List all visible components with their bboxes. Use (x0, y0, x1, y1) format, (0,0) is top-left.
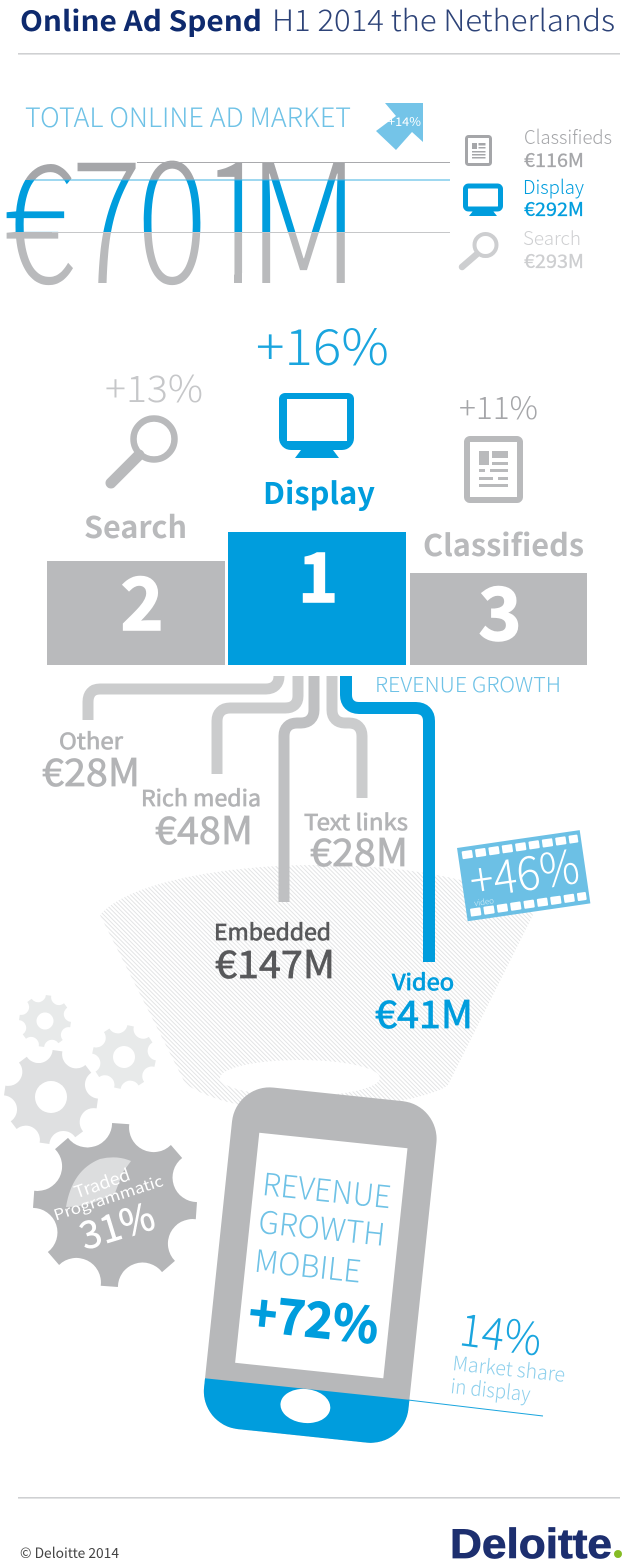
phone heading: MOBILE (253, 1236, 364, 1292)
podium step 2 (47, 546, 225, 665)
gear small right (86, 1019, 162, 1095)
film strip video growth: video (473, 895, 495, 909)
legend: display (466, 173, 585, 222)
category: embedded: €147M (215, 934, 335, 989)
category: other: €28M (42, 742, 140, 797)
category: video: Video (392, 965, 454, 997)
legend: display: €292M (524, 195, 584, 222)
pipe: rich media (217, 676, 298, 774)
pipe: video (346, 676, 429, 962)
phone screen (235, 1133, 407, 1378)
classifieds growth: +11% (459, 383, 538, 428)
category: video: €41M (375, 984, 473, 1039)
mobile growth figure: +72% (246, 1274, 382, 1359)
icon: magnifier (111, 418, 174, 483)
phone chin (204, 1378, 410, 1443)
market heading: TOTAL ONLINE AD MARKET (25, 96, 351, 135)
category: text links: €28M (310, 822, 408, 877)
category: rich media (141, 781, 261, 855)
panel: total online ad market (6, 103, 612, 286)
phone (198, 1083, 443, 1450)
phone heading: GROWTH (257, 1197, 388, 1255)
programmatic gear (28, 1118, 202, 1292)
podium step 1: 1 (298, 523, 338, 622)
category: embedded: Embedded (214, 915, 331, 947)
category: text links: Text links (304, 805, 408, 837)
label: search: Search (84, 503, 187, 547)
pipe: embedded (284, 676, 314, 902)
pipe: other (88, 676, 279, 720)
legend: display: Display (523, 173, 585, 200)
growth arrow badge: +14% (388, 113, 421, 130)
display growth: +16% (256, 308, 389, 380)
label: classifieds: Classifieds (423, 521, 584, 565)
deloitte logo: Deloitte (450, 1520, 612, 1567)
search growth: +13% (105, 359, 203, 413)
legend: classifieds (466, 123, 612, 173)
copyright: © Deloitte 2014 (20, 1543, 119, 1563)
legend: search: Search (523, 224, 581, 251)
legend: search: €293M (524, 247, 584, 274)
gear small top (16, 992, 74, 1050)
podium step 3 (410, 556, 587, 665)
gear medium (0, 1044, 104, 1150)
decorative gears (0, 992, 162, 1150)
category: other: Other (59, 724, 123, 756)
title bold part: Online Ad Spend (20, 0, 262, 40)
category: rich media: Rich media (141, 781, 261, 813)
big total figure: €701 (3, 93, 271, 332)
podium step 3: 3 (478, 556, 522, 662)
growth arrow badge (376, 103, 423, 150)
revenue growth label: REVENUE GROWTH (375, 668, 561, 698)
category: rich media: €48M (155, 800, 253, 855)
icon: monitor (279, 393, 354, 458)
podium step 2: 2 (120, 546, 164, 652)
category: text links (304, 805, 408, 877)
legend: classifieds: €116M (524, 146, 584, 173)
big total figure (6, 160, 345, 286)
programmatic gear: 31% (72, 1186, 161, 1261)
film strip video growth: +46% (464, 828, 583, 912)
panel: podium ranking (47, 308, 587, 665)
big total figure: M (247, 92, 360, 331)
phone heading (253, 1159, 394, 1294)
market share callout: 14% (456, 1293, 546, 1369)
home button (279, 1386, 332, 1426)
programmatic gear: Traded (70, 1161, 133, 1203)
market share callout (408, 1293, 567, 1416)
pipe: text links (332, 676, 362, 798)
icon: newspaper (467, 439, 520, 500)
podium step 1 (228, 523, 406, 665)
legend: search (462, 224, 584, 274)
label: display: Display (263, 469, 375, 513)
market share callout: Market share (451, 1347, 567, 1388)
market share callout: in display (449, 1370, 532, 1407)
legend: classifieds: Classifieds (524, 123, 612, 150)
funnel (100, 865, 533, 1112)
phone body (200, 1084, 440, 1447)
phone heading: REVENUE (261, 1159, 394, 1217)
header title (20, 0, 615, 40)
revenue pipes (88, 676, 429, 962)
programmatic gear: Programmatic (51, 1170, 166, 1225)
